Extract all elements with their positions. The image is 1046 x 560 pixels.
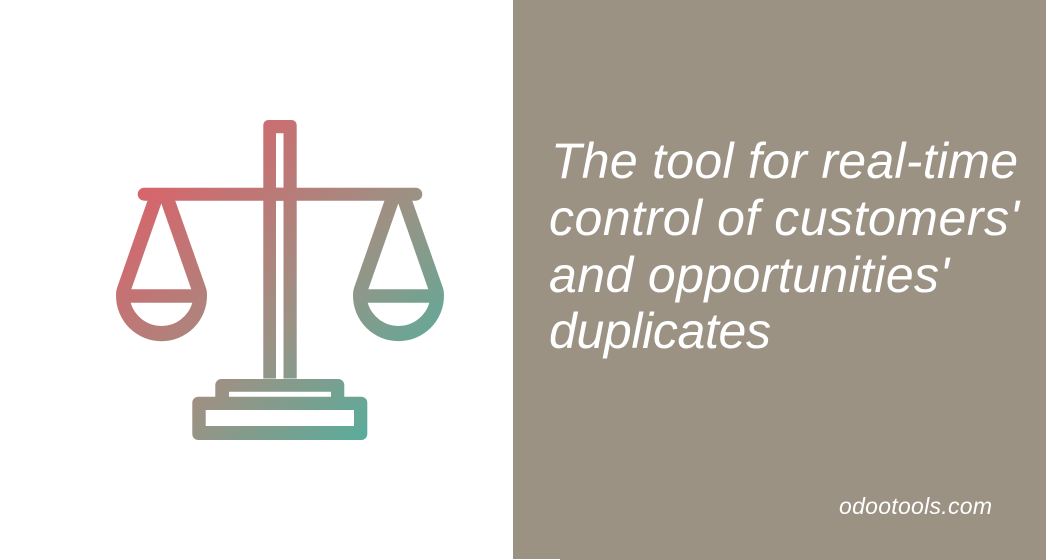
icon part: left pan — [116, 200, 207, 341]
heading: duplicates — [549, 303, 771, 359]
heading: and opportunities' — [549, 247, 950, 303]
panel: text background — [513, 0, 1046, 560]
heading: The tool for real-time — [551, 133, 1018, 189]
icon part: right pan — [353, 200, 444, 341]
icon part: lower base — [192, 397, 367, 440]
heading: control of customers' — [549, 190, 1020, 246]
icon part: crossbeam — [138, 188, 422, 201]
heading — [549, 133, 1020, 359]
icon part: upper base — [215, 379, 344, 397]
website label: odootools.com — [839, 493, 992, 519]
icon: balance scale — [116, 120, 444, 440]
icon part: central post — [263, 120, 297, 378]
